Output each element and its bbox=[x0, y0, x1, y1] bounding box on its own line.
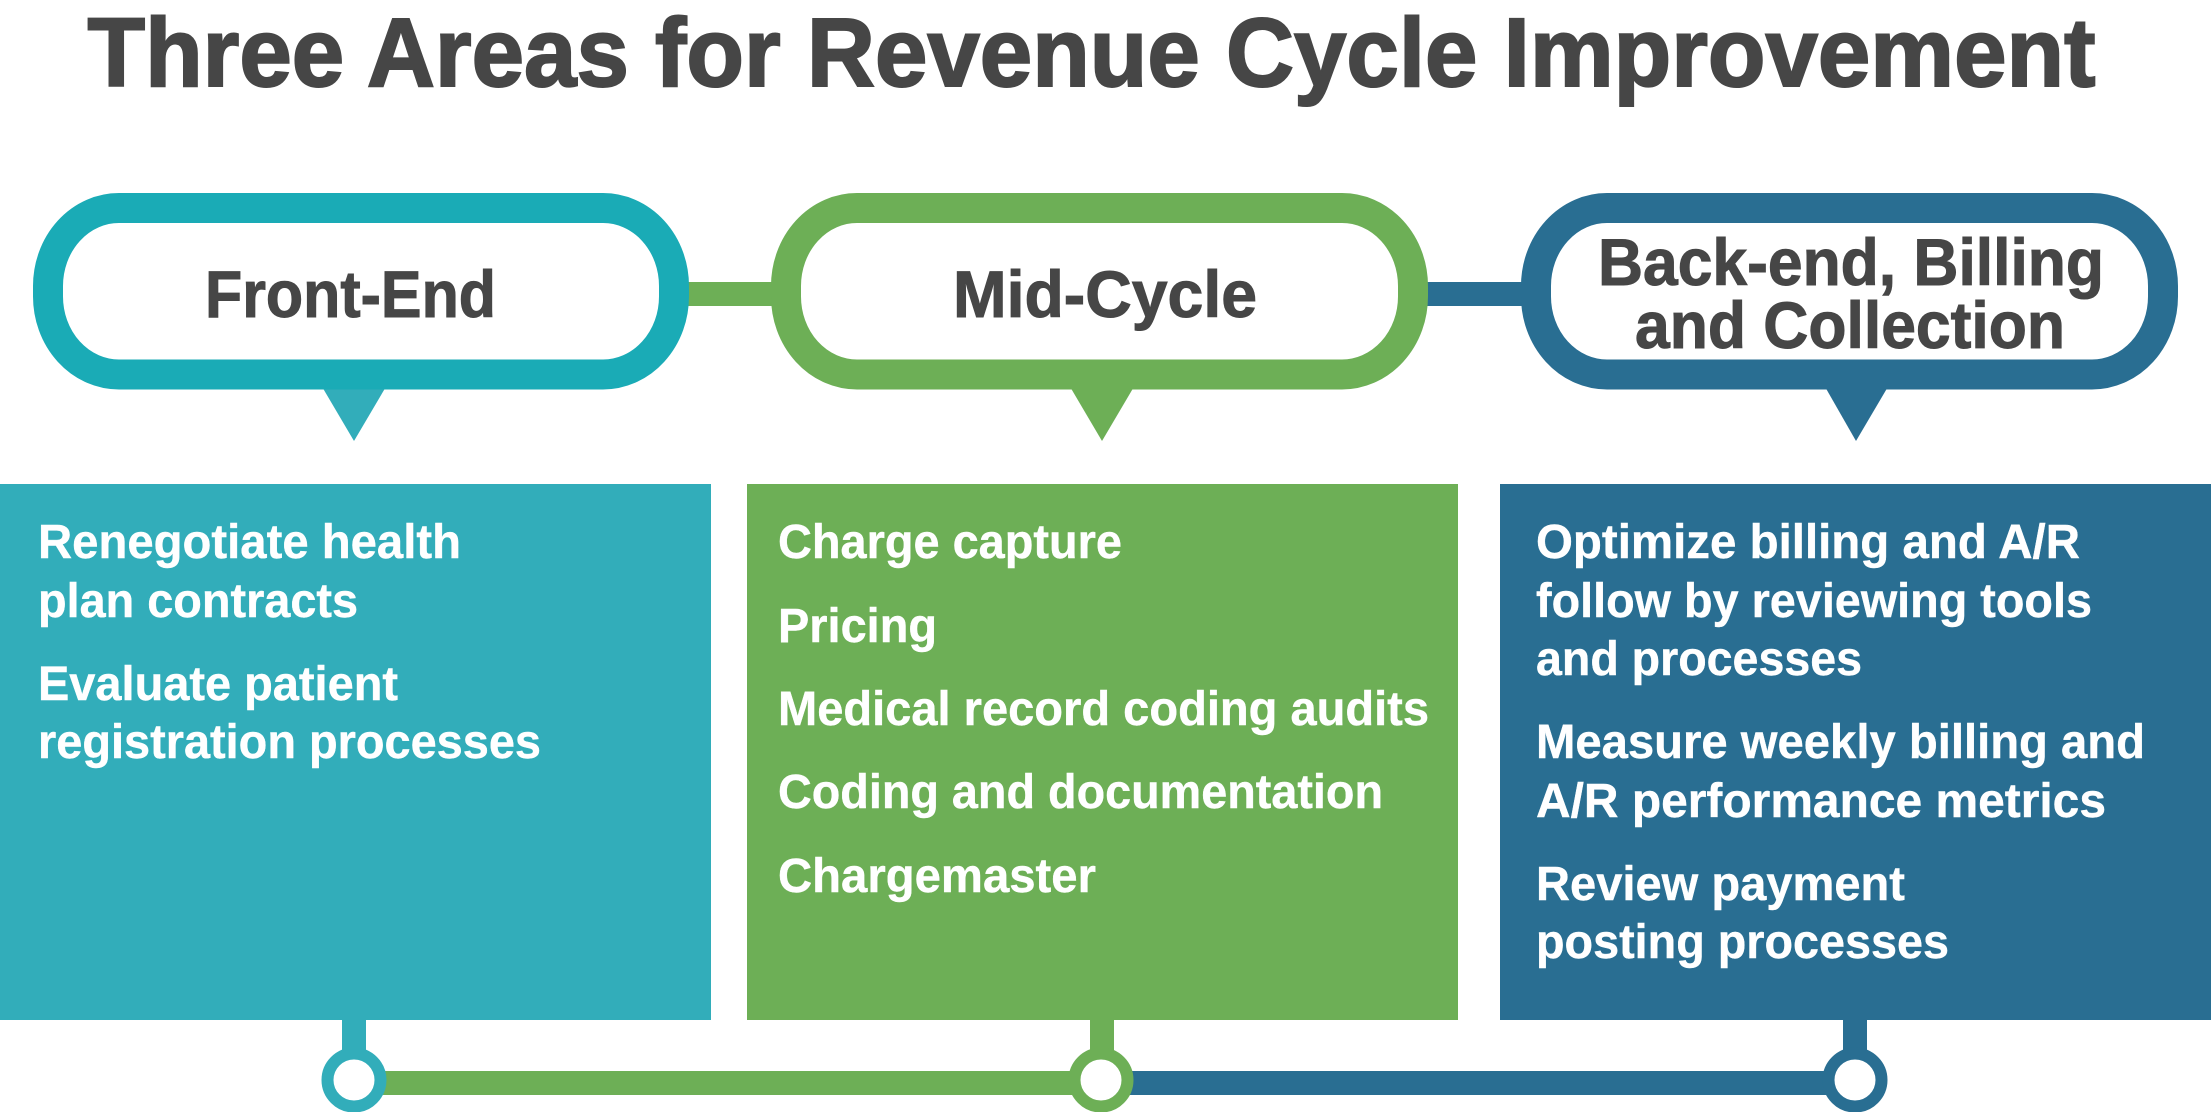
node: Front-End bbox=[328, 1054, 380, 1106]
callout pointer: Back-end bbox=[1824, 385, 1889, 441]
list: Front-End items bbox=[38, 516, 541, 769]
header: Front-End bbox=[48, 208, 674, 441]
node: Back-end bbox=[1828, 1054, 1882, 1106]
heading: Back-end, Billing and Collection: and Collection bbox=[1635, 288, 2065, 362]
list: Back-end items: and processes bbox=[1536, 633, 1862, 686]
stem: Back-end bbox=[1843, 1020, 1867, 1052]
header: Mid-Cycle bbox=[786, 208, 1413, 441]
pill: Front-End bbox=[48, 208, 674, 374]
panel background: Mid-Cycle bbox=[747, 484, 1458, 1020]
timeline bbox=[328, 1020, 1882, 1106]
callout pointer: Mid-Cycle bbox=[1069, 385, 1135, 441]
heading: Back-end, Billing and Collection: Back-end, Billing bbox=[1598, 225, 2104, 299]
title: Three Areas for Revenue Cycle Improvement bbox=[88, 0, 2096, 107]
list: Front-End items: registration processes bbox=[38, 716, 541, 769]
panel background: Back-end bbox=[1500, 484, 2211, 1020]
timeline bar: blue segment bbox=[1110, 1071, 1850, 1095]
node: Mid-Cycle bbox=[1074, 1054, 1128, 1106]
list: Mid-Cycle items: Coding and documentation bbox=[778, 766, 1383, 819]
panel background: Front-End bbox=[0, 484, 711, 1020]
header: Back-end, Billing and Collection bbox=[1536, 208, 2163, 441]
timeline bar: green segment bbox=[380, 1071, 1100, 1095]
panel: Mid-Cycle bbox=[747, 484, 1458, 1020]
connector: front-end to mid-cycle bbox=[680, 282, 780, 306]
list: Back-end items: A/R performance metrics bbox=[1536, 775, 2106, 828]
connector: mid-cycle to back-end bbox=[1420, 282, 1530, 306]
pill: Back-end bbox=[1536, 208, 2163, 374]
list: Back-end items: Measure weekly billing and bbox=[1536, 716, 2145, 769]
stem: Front-End bbox=[342, 1020, 366, 1052]
list: Back-end items bbox=[1536, 516, 2145, 969]
heading: Mid-Cycle: Mid-Cycle bbox=[953, 257, 1257, 331]
list: Back-end items: posting processes bbox=[1536, 916, 1949, 969]
heading: Front-End: Front-End bbox=[205, 257, 496, 331]
pill: Mid-Cycle bbox=[786, 208, 1413, 374]
list: Mid-Cycle items: Chargemaster bbox=[778, 850, 1096, 903]
list: Front-End items: plan contracts bbox=[38, 575, 358, 628]
list: Front-End items: Renegotiate health bbox=[38, 516, 461, 569]
panel: Front-End bbox=[0, 484, 711, 1020]
callout pointer: Front-End bbox=[321, 385, 387, 441]
list: Back-end items: Review payment bbox=[1536, 858, 1905, 911]
list: Front-End items: Evaluate patient bbox=[38, 658, 398, 711]
heading: Back-end, Billing and Collection bbox=[1598, 225, 2104, 362]
panel: Back-end bbox=[1500, 484, 2211, 1020]
list: Mid-Cycle items: Pricing bbox=[778, 600, 937, 653]
list: Mid-Cycle items: Charge capture bbox=[778, 516, 1122, 569]
list: Back-end items: follow by reviewing tools bbox=[1536, 575, 2092, 628]
list: Mid-Cycle items bbox=[778, 516, 1429, 903]
list: Back-end items: Optimize billing and A/R bbox=[1536, 516, 2080, 569]
stem: Mid-Cycle bbox=[1090, 1020, 1114, 1052]
list: Mid-Cycle items: Medical record coding audits bbox=[778, 683, 1429, 736]
